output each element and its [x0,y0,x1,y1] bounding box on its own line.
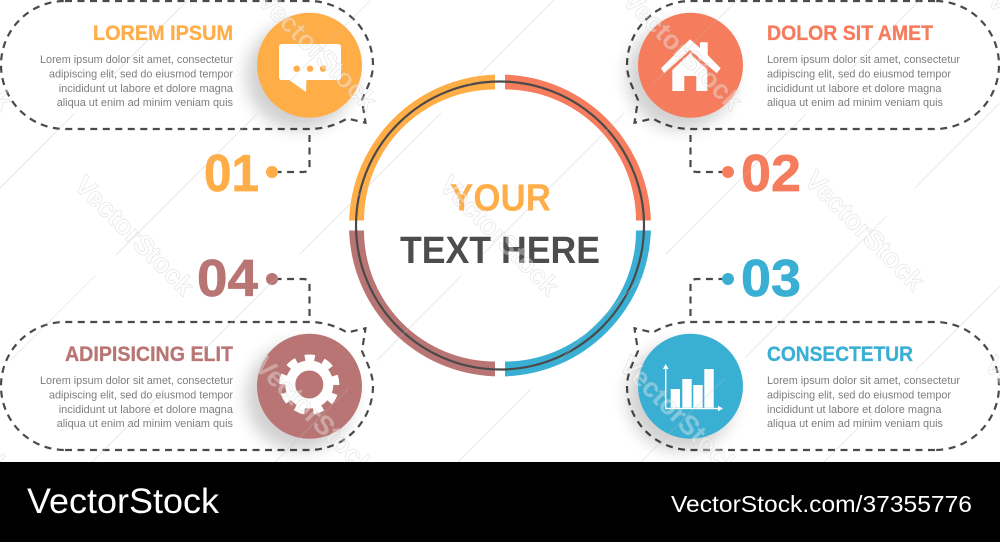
circle [257,13,362,118]
body text: aliqua ut enim ad minim veniam quis [57,418,233,430]
ring segment: coral [505,75,651,220]
number: 04 [197,250,258,308]
body text: aliqua ut enim ad minim veniam quis [57,97,233,109]
circle shadow [627,22,735,130]
icon: bar chart [663,364,723,411]
number: 02 [741,145,801,203]
body text [767,375,960,430]
body text: incididunt ut labore et dolore magna [59,83,234,95]
ring segment: orange [349,75,495,220]
panel: step 01 [1,1,373,203]
connector [278,135,310,172]
footer logo: VectorStock [27,482,220,521]
centre heading [400,178,600,272]
number: 03 [741,250,801,308]
body text: aliqua ut enim ad minim veniam quis [767,97,943,109]
body text: incididunt ut labore et dolore magna [767,83,942,95]
footer bar [0,462,1000,542]
title: LOREM IPSUM [93,22,233,45]
body text [767,54,960,109]
ring segment: mauve [349,230,495,376]
body text: aliqua ut enim ad minim veniam quis [767,418,943,430]
title: DOLOR SIT AMET [767,22,933,45]
body text: incididunt ut labore et dolore magna [767,404,942,416]
body text [40,54,234,109]
watermark text: VectorStock [69,170,201,302]
connector [690,279,722,316]
dashed speech bubble [627,322,999,450]
body text: adipiscing elit, sed do eiusmod tempor [767,390,951,402]
circle shadow [627,343,735,451]
body text: Lorem ipsum dolor sit amet, consectetur [767,375,960,387]
central ring [349,75,651,376]
circle [638,334,743,439]
connector dot [266,273,278,285]
dashed speech bubble [1,322,373,450]
connector dot [266,166,278,178]
body text: Lorem ipsum dolor sit amet, consectetur [40,54,233,66]
circle [257,334,362,439]
inner dark circle [356,82,644,370]
connector dot [722,273,734,285]
body text: adipiscing elit, sed do eiusmod tempor [767,68,951,80]
heading line: text here: TEXT HERE [400,230,600,272]
connector dot [722,166,734,178]
connector [278,279,310,316]
circle [638,13,743,118]
dashed speech bubble [1,1,373,129]
body text: Lorem ipsum dolor sit amet, consectetur [767,54,960,66]
icon: gear [283,358,335,410]
body text [40,375,234,430]
ring segment: blue [505,230,651,376]
body text: adipiscing elit, sed do eiusmod tempor [49,390,233,402]
panel: step 03 [627,250,999,451]
number: 01 [204,145,259,203]
dashed speech bubble [627,1,999,129]
watermark text: VectorStock [434,170,566,302]
title: ADIPISICING ELIT [65,343,233,366]
icon: speech bubble [279,44,341,92]
watermark text: VectorStock [799,165,931,297]
body text: incididunt ut labore et dolore magna [59,404,234,416]
watermark text: VectorStock [614,350,746,482]
circle shadow [246,343,354,451]
connector [690,135,722,172]
panel: step 02 [627,1,999,203]
heading line: your: YOUR [450,178,551,220]
body text: adipiscing elit, sed do eiusmod tempor [49,68,233,80]
circle shadow [246,22,354,130]
title: CONSECTETUR [767,343,913,366]
footer image id: VectorStock.com/37355776 [671,491,972,517]
icon: house [661,39,721,91]
watermark text: VectorStock [249,350,381,482]
body text: Lorem ipsum dolor sit amet, consectetur [40,375,233,387]
panel: step 04 [1,250,373,451]
